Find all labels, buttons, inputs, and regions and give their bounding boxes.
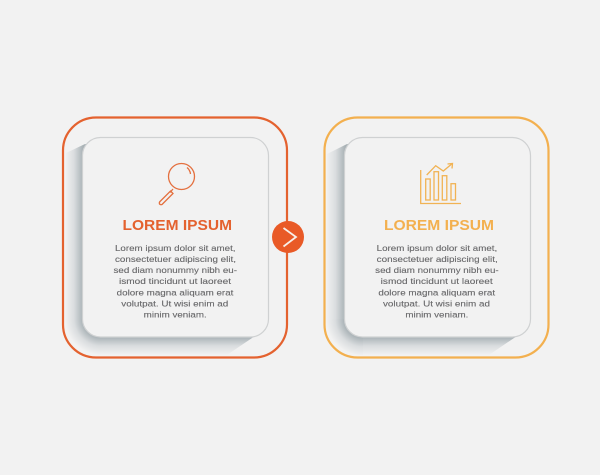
body text: minim veniam. (144, 310, 207, 320)
body text (375, 243, 499, 320)
body text: consectetuer adipiscing elit, (377, 254, 498, 264)
panel: step 1 (63, 118, 287, 358)
body text: Lorem ipsum dolor sit amet, (115, 243, 236, 253)
card shadow (65, 144, 255, 355)
body text: Lorem ipsum dolor sit amet, (377, 243, 497, 253)
panel: step 2 (324, 118, 548, 358)
body text (114, 243, 237, 320)
body text: sed diam nonummy nibh eu- (114, 265, 237, 275)
body text: volutpat. Ut wisi enim ad (121, 298, 229, 308)
inner card (82, 138, 268, 337)
body text: volutpat. Ut wisi enim ad (383, 298, 490, 308)
body text: sed diam nonummy nibh eu- (375, 265, 499, 275)
body text: consectetuer adipiscing elit, (115, 254, 236, 264)
outer orange rounded frame (63, 118, 287, 358)
body text: dolore magna aliquam erat (378, 287, 496, 297)
body text: minim veniam. (405, 310, 468, 320)
body text: ismod tincidunt ut laoreet (381, 276, 493, 286)
inner card (344, 138, 530, 337)
icon: bar chart with rising arrow (421, 164, 461, 204)
body text: ismod tincidunt ut laoreet (119, 276, 232, 286)
heading: LOREM IPSUM (384, 218, 494, 234)
outer amber rounded frame (324, 118, 548, 358)
heading: LOREM IPSUM (122, 218, 232, 234)
card shadow (326, 144, 517, 355)
icon: magnifying glass (159, 164, 194, 205)
arrow badge (272, 221, 304, 253)
body text: dolore magna aliquam erat (117, 287, 234, 297)
